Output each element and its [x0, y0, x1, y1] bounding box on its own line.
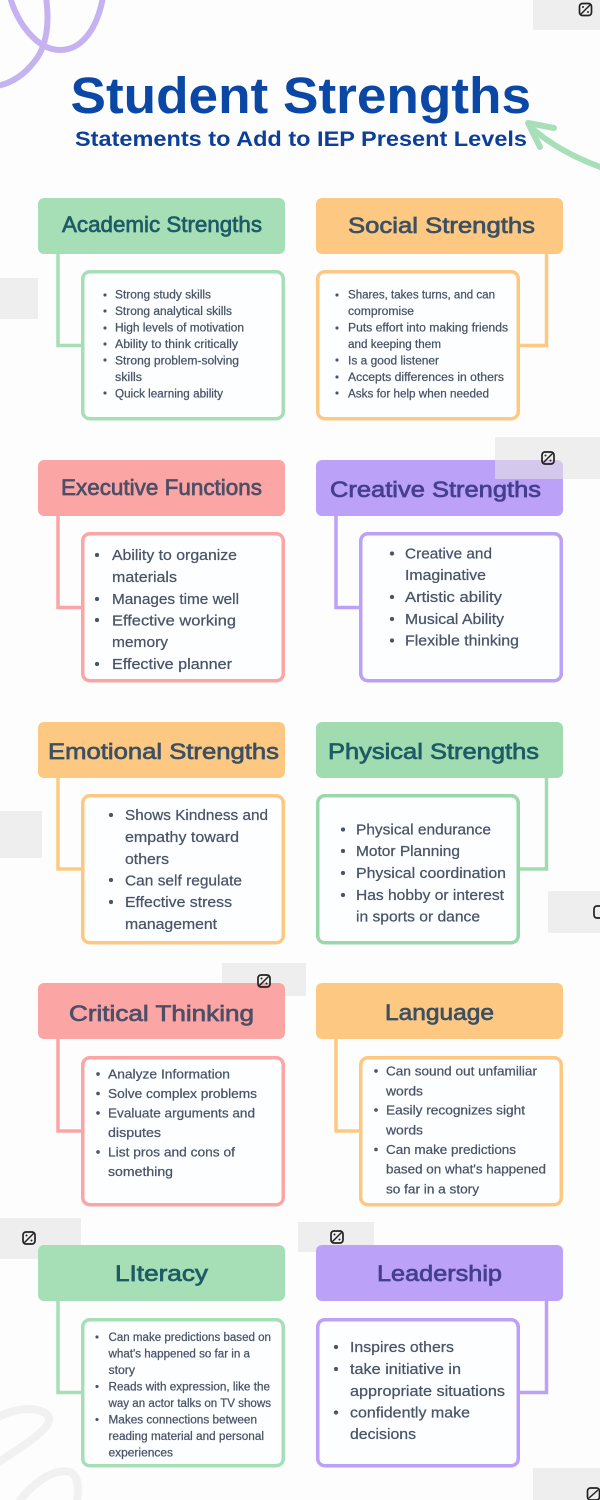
list: Creative and — [405, 546, 492, 562]
list: others — [125, 851, 169, 868]
list — [95, 547, 239, 673]
heading: Social Strengths — [348, 213, 535, 238]
list: words — [385, 1122, 424, 1138]
header — [38, 983, 285, 1039]
decoration: purple loops — [0, 0, 103, 86]
body box — [318, 272, 518, 419]
connector — [336, 1039, 360, 1131]
list: based on what's happened — [386, 1162, 546, 1176]
header — [316, 198, 563, 254]
image placeholder: top right — [533, 0, 600, 30]
list: Strong study skills — [115, 290, 211, 302]
icon: literacy placeholder — [23, 1232, 35, 1244]
heading: Physical Strengths — [328, 739, 539, 764]
list: Evaluate arguments and — [108, 1106, 255, 1120]
list: Physical coordination — [356, 865, 506, 882]
header — [38, 460, 285, 516]
header — [38, 722, 285, 778]
list: Strong analytical skills — [115, 306, 232, 318]
list: Easily recognizes sight — [386, 1102, 525, 1118]
list: Imaginative — [405, 567, 486, 584]
header — [316, 1245, 563, 1301]
body box — [83, 534, 283, 681]
header — [316, 983, 563, 1039]
list: management — [125, 916, 218, 933]
image placeholder: creative strengths — [495, 437, 600, 479]
list: Can make predictions — [386, 1142, 517, 1157]
body box — [318, 796, 518, 943]
list: Solve complex problems — [108, 1086, 258, 1101]
heading: Leadership — [377, 1261, 502, 1286]
list: Is a good listener — [348, 356, 439, 368]
list: Physical endurance — [356, 822, 491, 838]
list: and keeping them — [348, 339, 441, 351]
list: Effective stress — [125, 894, 232, 911]
list: List pros and cons of — [108, 1144, 235, 1160]
connector — [336, 516, 360, 608]
connector — [58, 1039, 82, 1131]
list: memory — [112, 634, 169, 651]
list — [104, 290, 244, 400]
header — [38, 1245, 285, 1301]
body box — [361, 1058, 561, 1205]
list: Artistic ability — [405, 589, 503, 606]
connector — [58, 516, 82, 608]
list: Analyze Information — [108, 1066, 230, 1082]
image placeholder: leadership — [298, 1222, 374, 1252]
list: Effective planner — [112, 656, 232, 673]
list: Quick learning ability — [115, 388, 223, 400]
list — [334, 1339, 505, 1443]
panel: academic strengths — [38, 198, 285, 419]
list — [109, 807, 268, 933]
image placeholder: left upper — [0, 278, 38, 319]
list: decisions — [350, 1426, 416, 1443]
panel: emotional strengths — [38, 722, 285, 943]
panel: leadership — [316, 1245, 563, 1466]
panel: critical thinking — [38, 983, 285, 1205]
connector — [58, 254, 82, 346]
list: Ability to organize — [112, 547, 237, 564]
list: Puts effort into making friends — [348, 322, 508, 334]
connector — [58, 1301, 82, 1392]
connector — [58, 778, 82, 869]
list: Reads with expression, like the — [108, 1382, 270, 1394]
image placeholder: right middle — [548, 891, 600, 933]
list: in sports or dance — [356, 908, 480, 926]
body box — [361, 534, 561, 681]
list: Effective working — [112, 612, 236, 630]
header — [38, 198, 285, 254]
list — [341, 822, 506, 926]
heading: Creative Strengths — [330, 477, 541, 502]
list: Musical Ability — [405, 611, 505, 628]
list: Can self regulate — [125, 872, 242, 890]
list: reading material and personal — [108, 1431, 264, 1443]
icon: critical thinking placeholder — [258, 975, 270, 987]
list: Makes connections between — [108, 1414, 257, 1426]
header — [316, 460, 563, 516]
list: confidently make — [350, 1404, 470, 1422]
list: what's happened so far in a — [107, 1348, 251, 1360]
list: empathy toward — [125, 829, 239, 846]
list: Can sound out unfamiliar — [386, 1064, 538, 1078]
heading: Executive Functions — [61, 475, 262, 500]
connector — [520, 1301, 546, 1392]
list: Strong problem-solving — [115, 356, 239, 368]
panel: literacy — [38, 1245, 285, 1466]
list: something — [108, 1164, 173, 1179]
list: disputes — [108, 1125, 162, 1140]
panel: physical strengths — [316, 722, 563, 943]
body box — [318, 1320, 518, 1466]
list: so far in a story — [386, 1182, 480, 1196]
heading: Emotional Strengths — [48, 739, 279, 764]
image placeholder: left middle — [0, 811, 42, 858]
body box — [83, 1320, 283, 1466]
subtitle: Statements to Add to IEP Present Levels — [75, 128, 527, 151]
list: Motor Planning — [356, 843, 460, 860]
body box — [83, 1058, 283, 1205]
body box — [83, 272, 283, 419]
list: Flexible thinking — [405, 632, 519, 650]
image placeholder: bottom right — [533, 1468, 600, 1500]
list: Accepts differences in others — [348, 372, 504, 384]
image placeholder: critical thinking — [222, 963, 306, 996]
icon: leadership placeholder — [331, 1231, 343, 1243]
heading: Critical Thinking — [69, 1001, 254, 1026]
header — [316, 722, 563, 778]
panel: creative strengths — [316, 460, 563, 681]
list: take initiative in — [350, 1361, 461, 1378]
connector — [520, 778, 546, 869]
decoration: grey loops — [0, 1409, 78, 1500]
panel: executive functions — [38, 460, 285, 681]
list: Inspires others — [350, 1339, 454, 1356]
title: Student Strengths — [70, 67, 531, 124]
list: way an actor talks on TV shows — [107, 1398, 271, 1410]
panel: language — [316, 983, 563, 1205]
list: Ability to think critically — [115, 339, 238, 351]
list: Asks for help when needed — [348, 388, 489, 400]
list: experiences — [108, 1448, 173, 1460]
heading: LIteracy — [115, 1261, 208, 1286]
heading: Academic Strengths — [62, 212, 262, 237]
list — [336, 290, 508, 400]
icon: green arrow — [528, 123, 600, 168]
connector — [520, 254, 546, 346]
list: story — [108, 1365, 135, 1377]
list — [96, 1332, 271, 1460]
list: materials — [112, 569, 177, 586]
list — [390, 546, 519, 650]
body box — [83, 796, 283, 943]
list: Shares, takes turns, and can — [348, 290, 495, 302]
panel: social strengths — [316, 198, 563, 419]
list — [96, 1066, 258, 1179]
list: High levels of motivation — [115, 322, 244, 334]
list: Can make predictions based on — [108, 1332, 271, 1344]
heading: Language — [385, 1000, 494, 1025]
list: skills — [115, 372, 142, 384]
image placeholder: literacy — [0, 1218, 81, 1259]
list: appropriate situations — [350, 1383, 505, 1400]
list — [374, 1064, 546, 1196]
list: Shows Kindness and — [125, 807, 268, 824]
list: compromise — [348, 306, 414, 318]
list: Has hobby or interest — [356, 887, 505, 904]
list: Manages time well — [112, 591, 239, 608]
list: words — [385, 1084, 424, 1098]
